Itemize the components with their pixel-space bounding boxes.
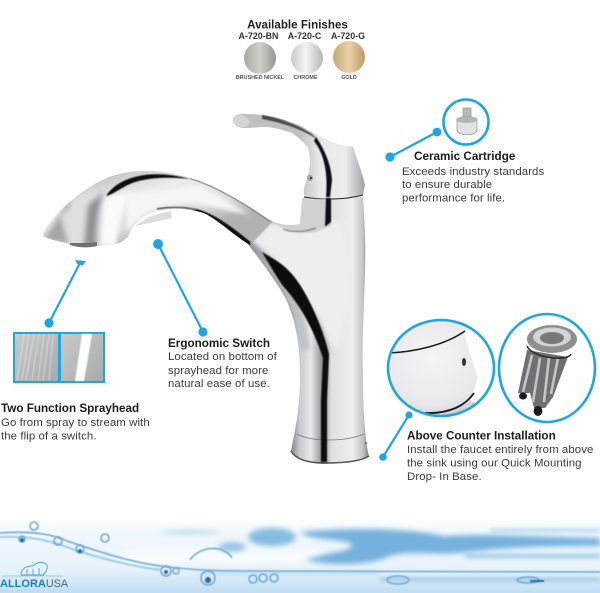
finish: brushed nickel: A-720-BN <box>239 31 278 41</box>
water band <box>0 518 600 593</box>
heading: available finishes: Available Finishes <box>247 18 348 32</box>
finish: chrome: A-720-C <box>288 31 322 41</box>
callout: two function sprayhead <box>1 260 150 442</box>
text block: Drop- In Base. <box>407 471 482 483</box>
text block <box>407 430 593 483</box>
finish: gold: A-720-G <box>331 31 365 41</box>
text block: Located on bottom of <box>168 351 278 363</box>
logo: Allora USA: ALLORAUSA <box>0 578 69 590</box>
icon: lion <box>2 562 63 576</box>
faucet neck and base <box>247 197 369 464</box>
sprayhead shading <box>43 201 73 244</box>
finish: chrome <box>288 31 323 81</box>
text block: to ensure durable <box>402 179 492 191</box>
text block: Install the faucet entirely from above <box>407 444 593 456</box>
text block <box>402 150 544 204</box>
text block: Ceramic Cartridge <box>414 150 516 163</box>
callout: ceramic cartridge <box>385 100 544 204</box>
text block: performance for life. <box>402 192 505 204</box>
icon: cartridge in circle <box>444 100 488 144</box>
spray and stream photos <box>13 332 105 383</box>
faucet spout and sprayhead <box>43 171 272 252</box>
text block: Above Counter Installation <box>407 430 556 442</box>
spout reflection <box>106 174 190 196</box>
text block <box>168 337 278 390</box>
base detail circle <box>388 320 500 420</box>
text block: sprayhead for more <box>168 365 268 377</box>
finish: gold: GOLD <box>341 75 357 81</box>
finish: chrome: CHROME <box>294 75 318 81</box>
callout: above counter installation <box>379 314 595 483</box>
finish: brushed nickel <box>236 31 285 81</box>
connector line <box>385 128 441 162</box>
text block: natural ease of use. <box>168 378 270 390</box>
connector line <box>379 411 413 461</box>
text block: Ergonomic Switch <box>168 337 270 350</box>
connector line <box>44 260 86 328</box>
finish: gold <box>331 31 365 81</box>
text block: the flip of a switch. <box>1 430 97 442</box>
heading: available finishes <box>236 18 365 81</box>
finish: brushed nickel: BRUSHED NICKEL <box>236 75 285 81</box>
text block <box>1 402 150 442</box>
mounting base circle <box>499 314 595 422</box>
dark reflection streak <box>262 252 329 462</box>
text block: the sink using our Quick Mounting <box>407 458 582 470</box>
callout: ergonomic switch <box>153 239 278 390</box>
text block: Go from spray to stream with <box>1 417 150 429</box>
connector line <box>153 239 208 337</box>
text block: Two Function Sprayhead <box>1 402 139 415</box>
text block: Exceeds industry standards <box>402 166 544 178</box>
logo: Allora USA <box>0 562 69 590</box>
faucet handle and hub <box>231 113 365 233</box>
faucet illustration <box>43 113 369 464</box>
